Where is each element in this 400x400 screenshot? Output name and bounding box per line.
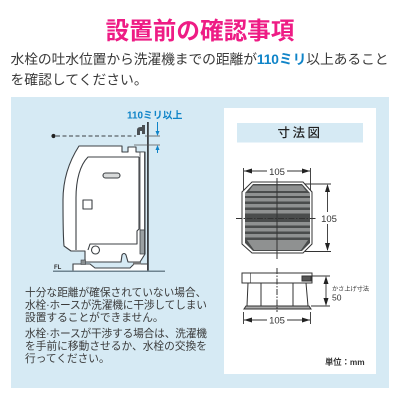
warning text: 十分な距離が確保されていない場合、 xyxy=(25,286,206,299)
right depth dimension: 105 xyxy=(321,214,337,225)
clearance arrows xyxy=(134,122,160,153)
height dimension: かさ上げ寸法 xyxy=(332,285,369,293)
side view of stand xyxy=(242,268,312,312)
top width dimension: 105 xyxy=(269,167,285,178)
height dimension: 50 xyxy=(332,292,342,302)
bottom width dimension xyxy=(244,312,310,326)
dashed water outlet line xyxy=(51,134,136,138)
warning text: 行ってください。 xyxy=(25,352,110,365)
bottom width dimension: 105 xyxy=(269,316,285,326)
title: 設置前の確認事項 xyxy=(106,18,295,45)
FL label: FL xyxy=(54,265,62,271)
panel: washer side diagram xyxy=(51,108,183,272)
panel: light blue background xyxy=(11,97,389,388)
intro text xyxy=(10,51,388,88)
label: 110 mm clearance: 110ミリ以上 xyxy=(127,108,183,122)
panel: dimension drawing xyxy=(224,108,376,374)
floor line xyxy=(53,270,165,272)
washer stand xyxy=(73,260,148,271)
heading: dimension drawing xyxy=(237,123,363,142)
warning text xyxy=(25,286,207,365)
height dimension xyxy=(311,276,369,306)
warning text: 水栓·ホースが干渉する場合は、洗濯機 xyxy=(25,327,207,340)
wall xyxy=(147,122,149,272)
warning text: 設置することができません。 xyxy=(25,311,164,324)
right depth dimension xyxy=(305,184,337,252)
heading: dimension drawing: 寸法図 xyxy=(277,125,323,140)
top view of stand xyxy=(236,178,316,259)
intro text: を確認してください。 xyxy=(10,72,148,88)
unit note: 単位：mm xyxy=(325,357,365,367)
intro text: 水栓の吐水位置から洗濯機までの距離が110ミリ以上あること xyxy=(10,51,388,67)
warning text: 水栓·ホースが洗濯機に干渉してしまい xyxy=(25,298,207,312)
washer body xyxy=(63,146,145,262)
faucet xyxy=(137,125,145,135)
warning text: を手前に移動させるか、水栓の交換を xyxy=(25,340,207,352)
top width dimension xyxy=(244,167,310,190)
